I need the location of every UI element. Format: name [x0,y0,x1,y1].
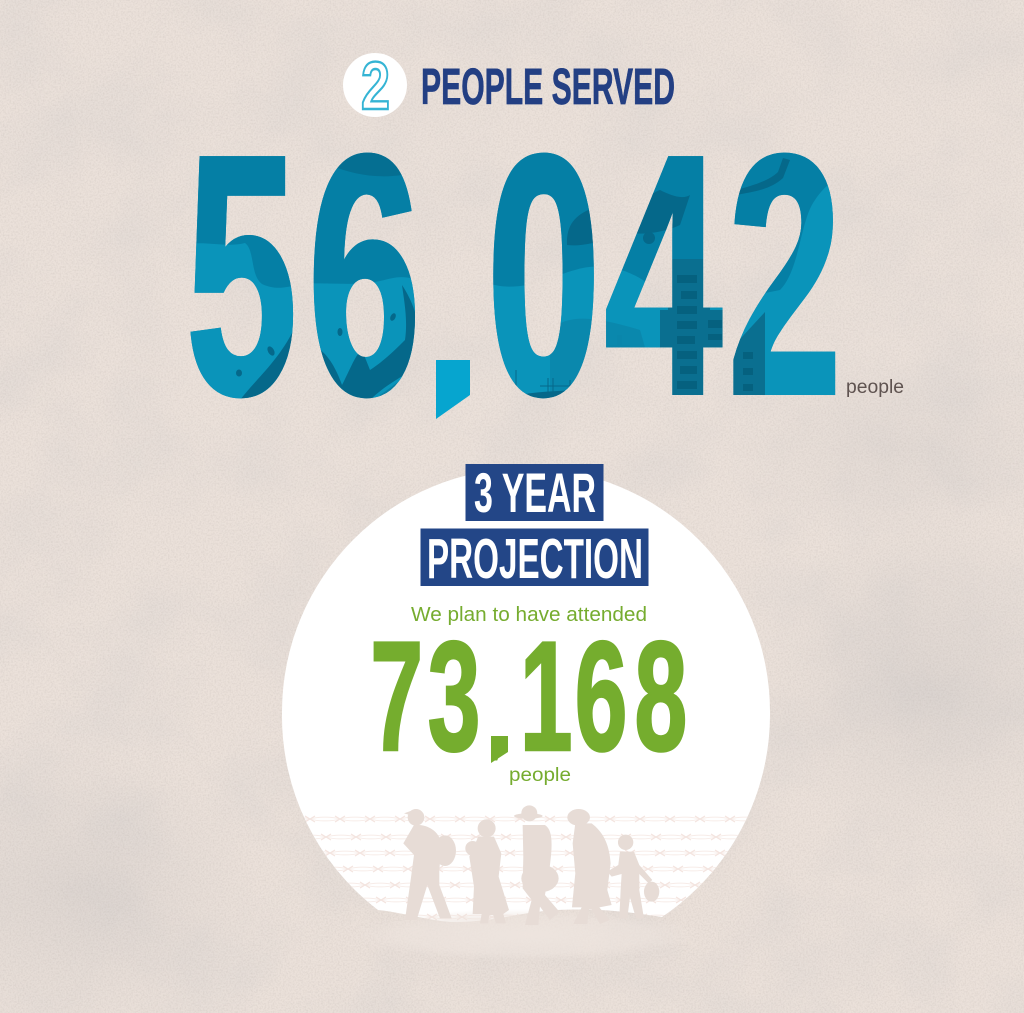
icon: numbered circle 2: 2 [361,48,390,124]
projected number 73,168: 6 [575,610,628,784]
helicopters [567,208,593,245]
top darker band [338,152,402,176]
tall building in the 4 [668,259,710,404]
digits filled with illustrated scene: 2 [728,86,842,465]
man with hat and bag [514,805,559,925]
unit label: people [846,377,904,398]
digits filled with illustrated scene: 0 [487,86,601,465]
heading text: PEOPLE SERVED [421,58,675,115]
ground [350,909,700,961]
banner: 3 year [466,461,604,524]
big number 56,042 people [190,152,904,419]
leaf foliage [241,332,292,398]
banner: 3 year: 3 YEAR [474,461,596,524]
icon: numbered circle 2 [343,48,407,124]
soil specks [236,370,242,376]
person with backpack [403,809,456,920]
digits filled with illustrated scene [190,152,836,398]
grave markers and ground [609,335,630,362]
projected number 73,168: 8 [634,610,687,784]
water wave layer [190,186,835,398]
lower hill layer [550,318,644,392]
heading: people served [343,48,675,124]
projected number 73,168: 3 [428,610,481,784]
comma [431,328,470,419]
comma: , [431,328,453,417]
banner: projection [420,527,648,591]
child with bag [607,835,659,918]
projected number 73,168: , [491,696,501,763]
old woman [567,809,612,924]
digits filled with illustrated scene: 6 [308,85,421,465]
barbed wire fence [304,816,748,920]
projected number 73,168: 7 [370,610,423,784]
projected number 73,168: 1 [520,610,573,784]
silhouettes of refugee family [403,805,659,925]
white circle panel [282,468,770,922]
digits filled with illustrated scene: 4 [604,85,723,465]
woman with child [465,819,509,923]
building in the 2 [733,312,765,395]
projection circle [282,464,770,955]
projection intro text: We plan to have attended [411,604,647,626]
banner: projection: PROJECTION [427,527,643,591]
digits filled with illustrated scene: 5 [186,87,297,466]
projected unit label: people [509,765,571,786]
projected number 73,168 [370,610,687,784]
